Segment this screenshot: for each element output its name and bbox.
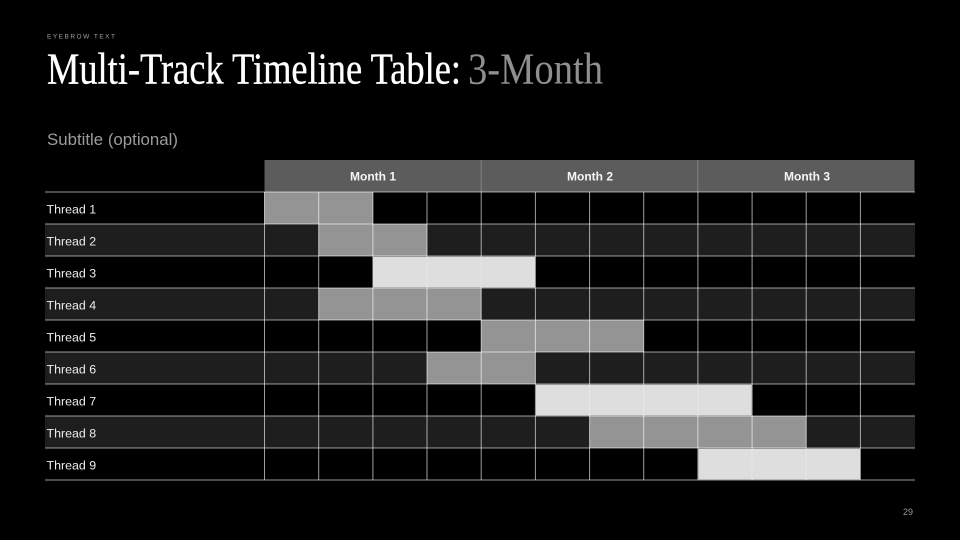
light timeline bars [373,257,860,480]
thread labels [46,202,96,472]
thread labels: Thread 5 [46,330,96,344]
grid lines [45,192,915,480]
page number: 29 [903,507,913,517]
thread labels: Thread 9 [46,458,96,472]
thread labels: Thread 8 [46,426,96,440]
subtitle: Subtitle (optional) [47,131,178,149]
thread labels: Thread 4 [46,298,96,312]
eyebrow text: EYEBROW TEXT [47,34,115,40]
gray timeline bars [264,192,806,448]
thread labels: Thread 3 [46,266,96,280]
alternating row backgrounds [45,224,915,448]
thread labels: Thread 1 [46,202,96,216]
timeline table [45,160,915,480]
thread labels: Thread 2 [46,234,96,248]
title: 3-Month [468,44,603,94]
month header band [264,160,914,192]
month header band: Month 3 [784,170,830,184]
title: Multi-Track Timeline Table: [47,44,461,94]
thread labels: Thread 7 [46,394,96,408]
thread labels: Thread 6 [46,362,96,376]
month header band: Month 2 [567,170,613,184]
month header band: Month 1 [350,170,396,184]
